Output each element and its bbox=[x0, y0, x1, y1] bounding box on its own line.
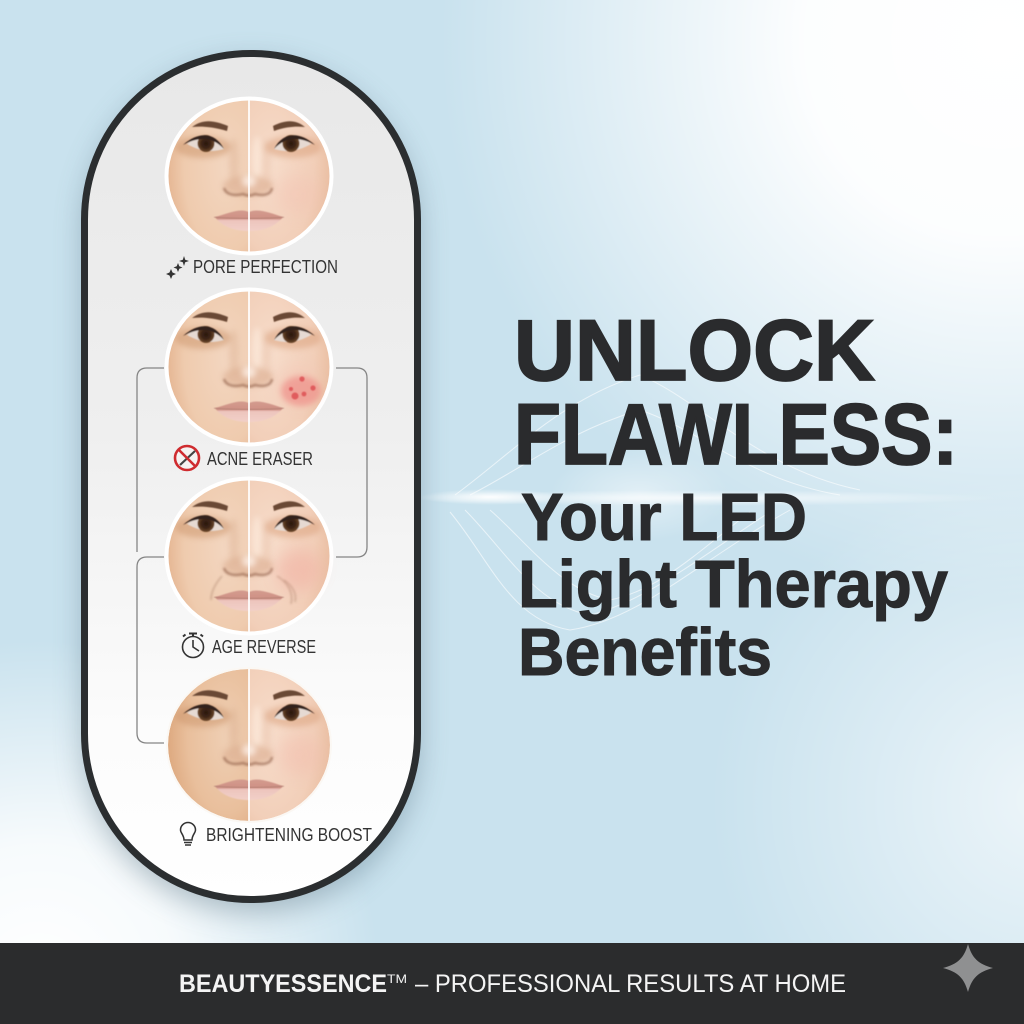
label: pore perfection: PORE PERFECTION bbox=[193, 257, 338, 277]
heading: unlock flawless: UNLOCK bbox=[514, 303, 875, 399]
subheading: your led light therapy benefits: Your LED bbox=[521, 480, 807, 555]
label: brightening boost: BRIGHTENING BOOST bbox=[206, 825, 372, 845]
label: acne eraser: ACNE ERASER bbox=[207, 449, 313, 469]
icon: sparkles bbox=[166, 256, 189, 279]
benefit: age reverse bbox=[166, 474, 332, 658]
subheading: your led light therapy benefits bbox=[518, 480, 948, 690]
icon: light bulb bbox=[180, 823, 196, 845]
face: acne eraser bbox=[166, 285, 332, 449]
face: pore perfection bbox=[166, 94, 332, 258]
benefit: pore perfection bbox=[166, 94, 338, 279]
icon: four-point star bbox=[943, 944, 993, 992]
face: age reverse bbox=[166, 474, 332, 638]
label: age reverse: AGE REVERSE bbox=[212, 637, 316, 657]
title bbox=[514, 303, 958, 690]
icon: no acne sign bbox=[175, 446, 199, 470]
face: brightening boost bbox=[167, 663, 331, 827]
benefit: acne eraser bbox=[166, 285, 332, 470]
heading: unlock flawless: FLAWLESS: bbox=[514, 387, 958, 483]
footer brand text: BEAUTYESSENCE bbox=[179, 970, 387, 998]
connector lines bbox=[137, 368, 367, 743]
pill drop shadow bbox=[84, 62, 418, 912]
footer brand text bbox=[179, 970, 846, 998]
benefit: brightening boost bbox=[167, 663, 372, 845]
panel: before and after pill bbox=[84, 54, 418, 912]
footer bar bbox=[0, 943, 1024, 1024]
subheading: your led light therapy benefits: Light Therapy bbox=[518, 547, 948, 622]
footer brand text: TM bbox=[387, 972, 407, 986]
pill body bbox=[84, 54, 418, 900]
light wave decoration bbox=[400, 375, 1000, 630]
heading: unlock flawless bbox=[514, 303, 958, 483]
icon: stopwatch bbox=[182, 634, 204, 658]
subheading: your led light therapy benefits: Benefits bbox=[518, 615, 772, 690]
footer brand text: – PROFESSIONAL RESULTS AT HOME bbox=[415, 970, 846, 998]
